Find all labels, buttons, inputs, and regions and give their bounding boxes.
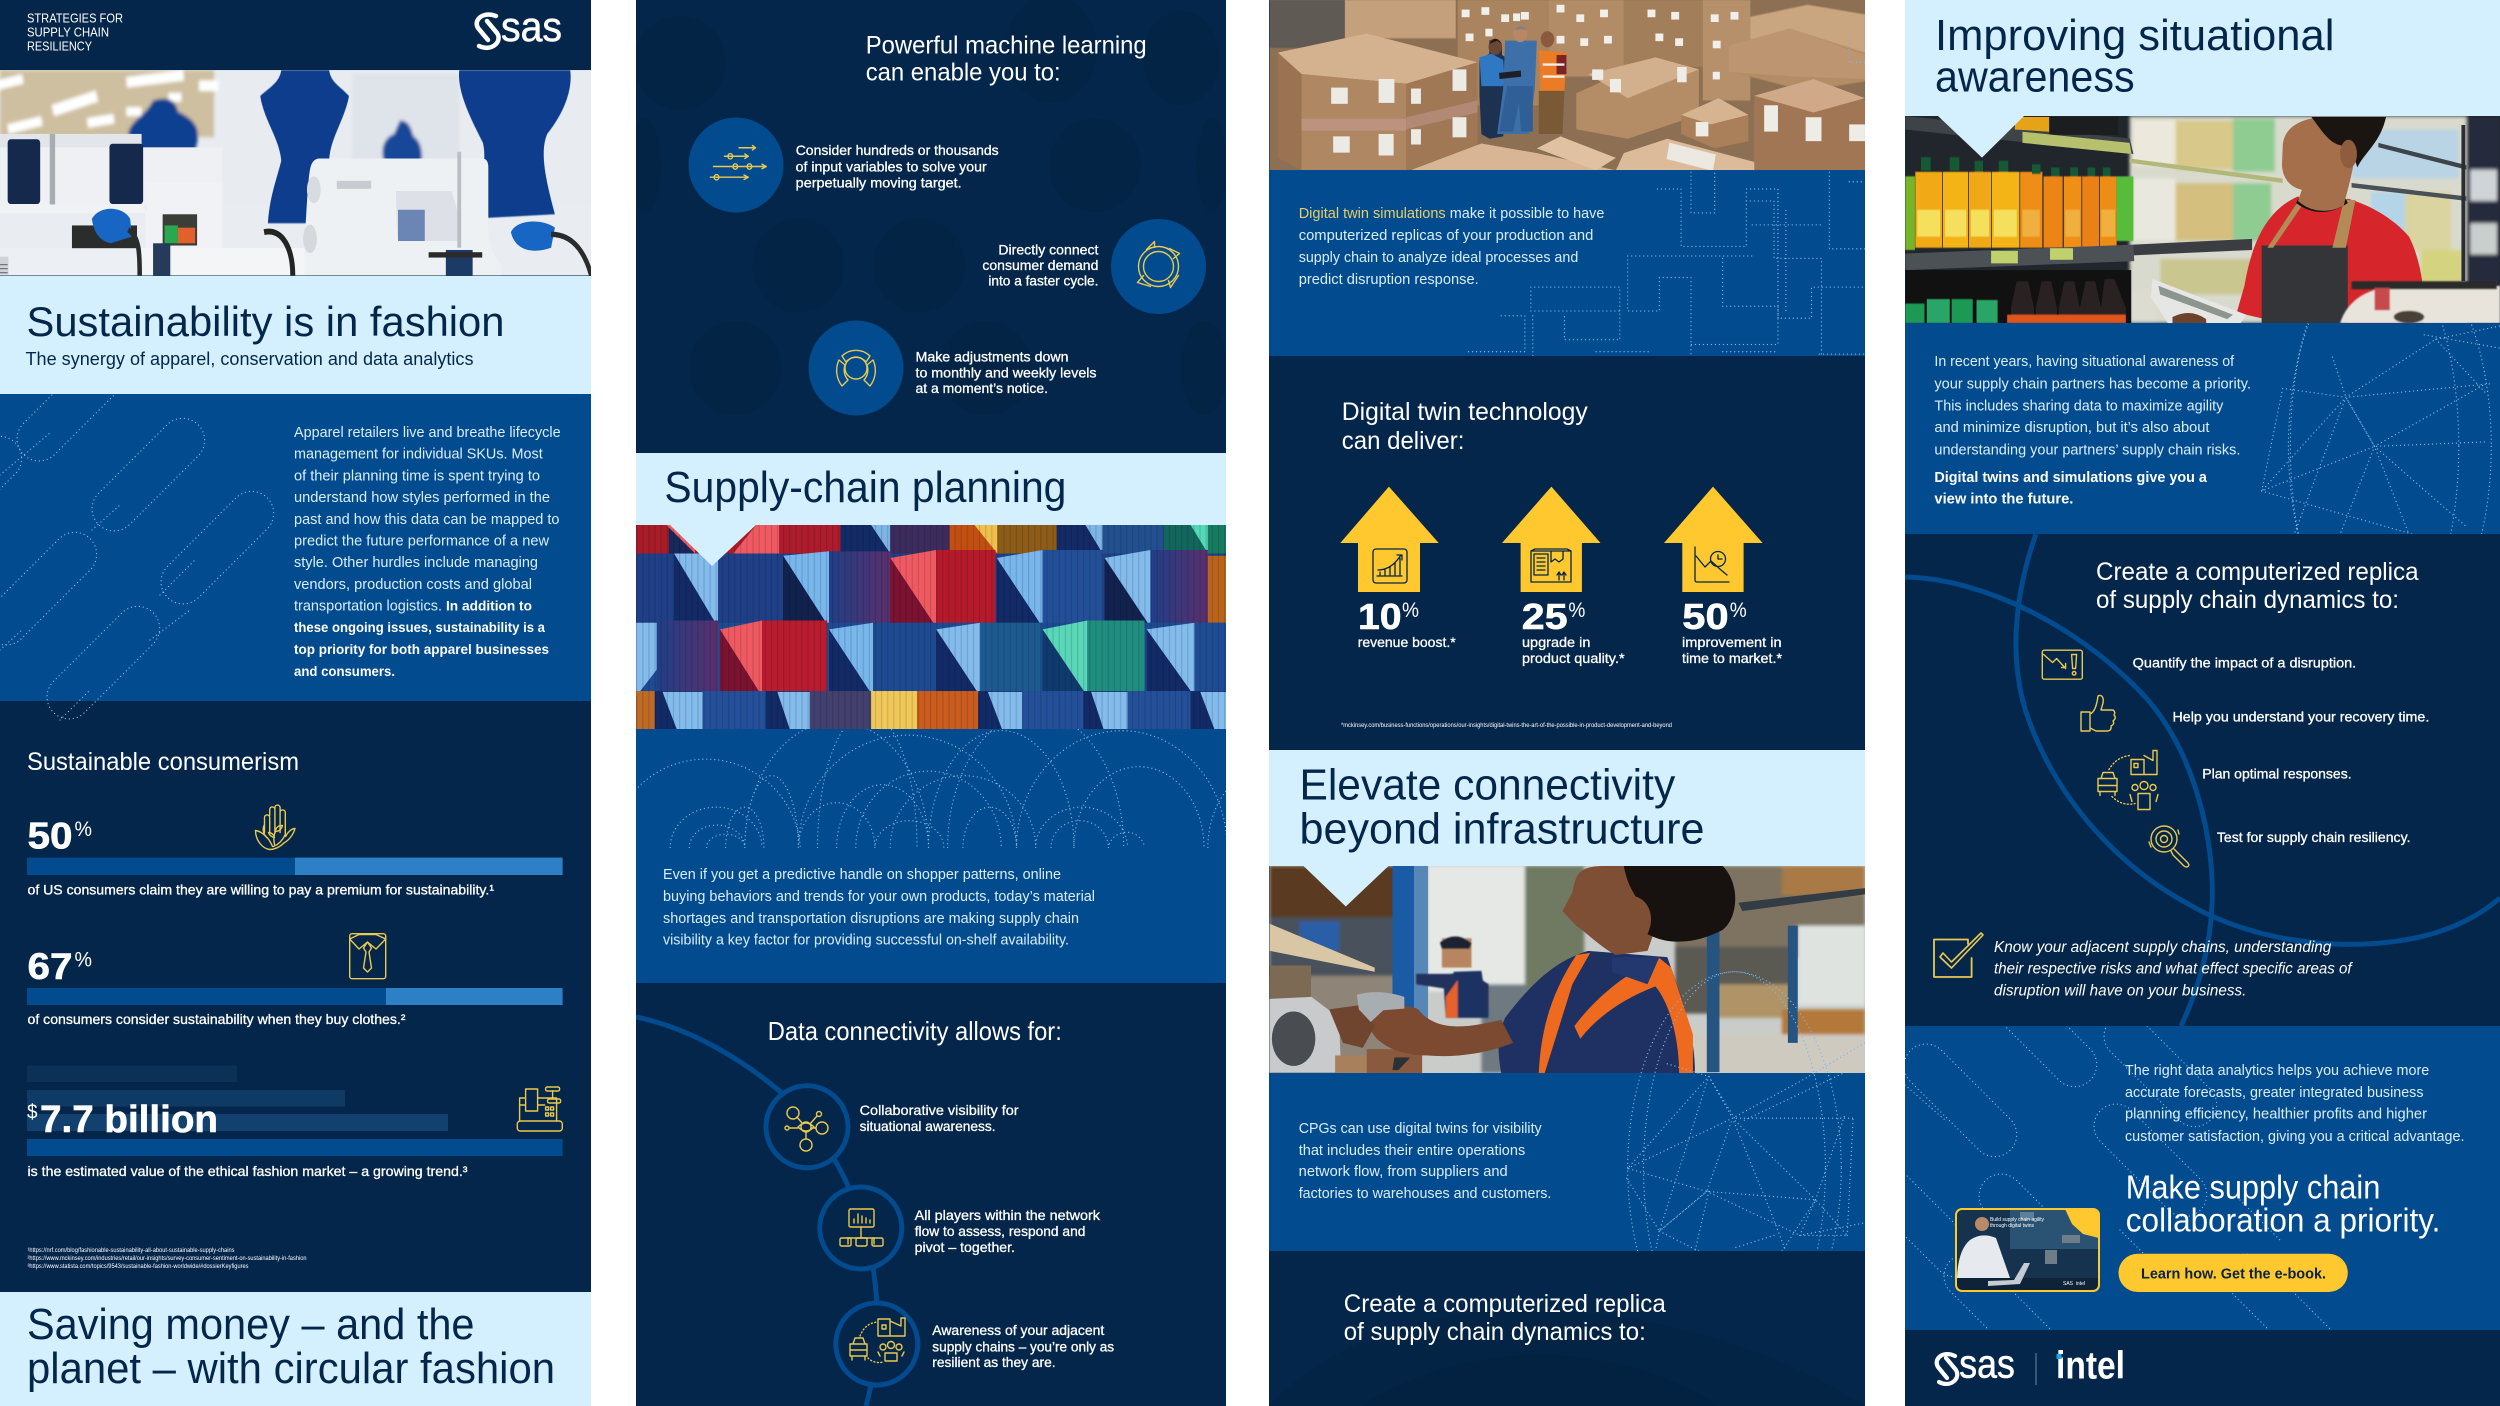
item: directly connect consumer demand: into a faster cycle. <box>988 273 1098 289</box>
stat: 7.7 billion: 7.7 billion <box>40 1099 218 1141</box>
callout: know your adjacent supply chains: disruption will have on your business. <box>1994 982 2246 999</box>
dotted globe pattern <box>2261 323 2500 534</box>
woman <box>1499 951 1695 1073</box>
analytics text: The right data analytics helps you achieve more <box>2125 1063 2429 1079</box>
panel: column 2 machine learning and supply-chain planning <box>636 0 1226 1406</box>
network flow text: factories to warehouses and customers. <box>1299 1186 1551 1202</box>
item: collaborative visibility: Collaborative visibility for <box>860 1102 1019 1118</box>
intro text: style. Other hurdles include managing <box>294 555 538 571</box>
panel: column 4 situational awareness <box>1855 0 2500 1406</box>
item: directly connect consumer demand <box>982 219 1206 314</box>
stat: 50 percent time to market: % <box>1730 599 1747 622</box>
panel: visibility blue section <box>636 729 1226 983</box>
item: make adjustments: to monthly and weekly levels <box>916 365 1096 381</box>
intro text: top priority for both apparel businesses <box>294 641 549 657</box>
stat: 50 percent: 50 <box>28 816 72 857</box>
curved lines background <box>1905 534 2500 1026</box>
row 3 <box>636 691 655 731</box>
intro text: management for individual SKUs. Most <box>294 447 543 463</box>
title band: elevate connectivity <box>1269 750 1865 866</box>
icon: shirt and tie <box>350 934 386 979</box>
panel: visibility network flow blue section <box>1269 971 1865 1251</box>
stat: 7.7 billion: is the estimated value of the ethical fashion market – a growing trend.³ <box>28 1163 468 1179</box>
item: make adjustments: at a moment’s notice. <box>916 380 1048 396</box>
network flow text: network flow, from suppliers and <box>1299 1164 1508 1180</box>
heading: create a computerized replica: Create a computerized replica <box>2096 558 2419 586</box>
item: all players within the network: All players within the network <box>915 1207 1101 1223</box>
situational awareness text <box>1934 354 2251 508</box>
footer logos: SAS and Intel <box>1937 1343 2125 1388</box>
photo: sewing machines and blue mannequins <box>0 70 591 275</box>
panel: column 1 sustainability <box>0 0 591 1406</box>
item: directly connect consumer demand: Directly connect <box>998 242 1099 258</box>
left pallet <box>1278 33 1477 84</box>
item: directly connect consumer demand: consumer demand <box>982 257 1098 273</box>
digital twin text: predict disruption response. <box>1299 271 1479 288</box>
bottom bottles <box>1905 270 2131 323</box>
item: consider input variables: Consider hundreds or thousands <box>796 142 999 158</box>
stat: 67 percent <box>27 946 563 1027</box>
stat: 50 percent: of US consumers claim they are willing to pay a premium for sustainability.¹ <box>28 882 494 898</box>
faint circle background <box>630 0 1227 415</box>
cart <box>2340 281 2500 323</box>
item: collaborative visibility <box>766 1086 1019 1168</box>
panel: data analytics call to action <box>1855 965 2500 1376</box>
intro text: Apparel retailers live and breathe lifecycle <box>294 425 561 441</box>
dotted chain pattern <box>0 394 274 721</box>
heading: make supply chain collaboration a priority: collaboration a priority. <box>2126 1201 2440 1238</box>
intro text <box>294 425 561 679</box>
footnote: digital twin source: *mckinsey.com/business-functions/operations/our-insights/digital-twins-the-art-of-the-possible-in-product-development-and-beyond <box>1341 723 1672 729</box>
icon: cash register <box>517 1087 562 1131</box>
digital twin text: supply chain to analyze ideal processes and <box>1299 249 1578 266</box>
item: quantify impact of a disruption: Quantify the impact of a disruption. <box>2133 654 2356 670</box>
row 2 <box>636 623 1227 694</box>
stat: 50 percent time to market <box>1664 487 1783 666</box>
header: document label: STRATEGIES FOR <box>27 12 123 26</box>
heading: powerful machine learning <box>866 32 1147 86</box>
bottles <box>1905 157 2133 250</box>
item: awareness of adjacent supply chains <box>836 1303 1114 1385</box>
small white labels background <box>1462 5 1738 79</box>
pointer: title band notch <box>670 525 756 566</box>
item: awareness of adjacent supply chains: Awareness of your adjacent <box>932 1322 1104 1338</box>
title band: elevate connectivity: Elevate connectivity <box>1300 760 1675 809</box>
button: learn how <box>2118 1254 2348 1292</box>
panel: column 3 digital twins and connectivity <box>1269 0 1865 1406</box>
pointer: improving band notch <box>1938 116 2024 158</box>
item: plan optimal responses: Plan optimal responses. <box>2202 765 2352 781</box>
visibility text <box>663 866 1095 948</box>
item: collaborative visibility: situational awareness. <box>860 1118 996 1134</box>
analytics text: accurate forecasts, greater integrated business <box>2125 1085 2424 1101</box>
heading: create a computerized replica <box>2096 558 2419 614</box>
logo: SAS <box>477 3 562 50</box>
footer logos: SAS and Intel: intel <box>2056 1344 2125 1388</box>
item: all players within the network <box>820 1187 1101 1269</box>
man <box>2237 196 2425 323</box>
button: learn how: Learn how. Get the e-book. <box>2141 1267 2326 1283</box>
heading: create a computerized replica <box>1344 1290 1666 1346</box>
floor <box>1410 144 1616 170</box>
heading: create a computerized replica: of supply chain dynamics to: <box>2096 586 2399 614</box>
item: all players within the network: flow to assess, respond and <box>915 1223 1085 1239</box>
item: consider input variables: of input variables to solve your <box>796 158 987 174</box>
analytics text: planning efficiency, healthier profits and higher <box>2125 1107 2427 1123</box>
title band: improving situational awareness: Improving situational <box>1935 11 2334 60</box>
title band: supply-chain planning: Supply-chain planning <box>664 463 1066 512</box>
digital twin text: computerized replicas of your production and <box>1299 227 1593 244</box>
stat: 25 percent product quality: product quality.* <box>1522 650 1625 666</box>
title band: elevate connectivity: beyond infrastructure <box>1300 805 1704 854</box>
situational awareness text: and minimize disruption, but it’s also about <box>1934 420 2209 436</box>
stat: 25 percent product quality: % <box>1568 599 1585 622</box>
intro text: transportation logistics. <box>294 599 442 615</box>
header: document label: RESILIENCY <box>27 40 93 54</box>
title band: saving money and the planet <box>0 1292 591 1406</box>
visibility text: Even if you get a predictive handle on shopper patterns, online <box>663 866 1061 883</box>
connector: curved line through data connectivity items <box>636 1017 877 1406</box>
title band: improving situational awareness <box>1905 0 2500 116</box>
footer logos: SAS and Intel: sas <box>1959 1343 2015 1387</box>
people <box>1479 39 1504 139</box>
header: document label <box>27 12 123 54</box>
item: awareness of adjacent supply chains: resilient as they are. <box>932 1354 1056 1370</box>
panel: intro blue section <box>0 394 591 721</box>
item: plan optimal responses <box>2098 750 2352 810</box>
faint concentric curves background <box>1269 1310 1865 1406</box>
stat: 25 percent product quality: upgrade in <box>1522 634 1590 650</box>
panel: situational awareness blue section <box>1905 323 2500 534</box>
situational awareness text: In recent years, having situational awareness of <box>1934 354 2235 370</box>
stat: 50 percent: % <box>74 818 92 841</box>
title band: saving money and the planet: planet – with circular fashion <box>27 1344 555 1393</box>
analytics text <box>2125 1063 2464 1145</box>
heading: digital twin technology: can deliver: <box>1342 427 1464 455</box>
item: make adjustments: Make adjustments down <box>916 349 1068 365</box>
network flow text <box>1299 1121 1551 1202</box>
callout: know your adjacent supply chains: Know your adjacent supply chains, understanding <box>1994 939 2332 956</box>
icon: hand holding plant <box>256 805 295 850</box>
item: all players within the network: pivot – together. <box>915 1239 1015 1255</box>
item: make adjustments <box>808 320 1096 416</box>
heading: digital twin technology: Digital twin technology <box>1342 398 1588 426</box>
intro text: past and how this data can be mapped to <box>294 512 560 528</box>
situational awareness text: your supply chain partners has become a priority. <box>1934 376 2251 392</box>
stat: 10 percent revenue boost: revenue boost.* <box>1358 634 1456 650</box>
situational awareness text: This includes sharing data to maximize agility <box>1934 399 2224 415</box>
intro text: and consumers. <box>294 663 395 679</box>
title band: supply-chain planning <box>636 453 1226 525</box>
dotted chain pattern <box>1855 965 2346 1376</box>
pointer: elevate band notch <box>1304 866 1388 906</box>
item: consider input variables <box>688 118 999 212</box>
title band: saving money and the planet: Saving money – and the <box>27 1300 474 1349</box>
title band: sustainability is in fashion: The synergy of apparel, conservation and data analytics <box>26 348 474 369</box>
right boxes <box>1576 68 1699 139</box>
e-book thumbnail: through digital twins <box>1990 1223 2034 1229</box>
callout: know your adjacent supply chains: their respective risks and what effect specific areas of <box>1994 961 2353 978</box>
analytics text: customer satisfaction, giving you a critical advantage. <box>2125 1129 2464 1145</box>
intro text: In addition to <box>446 598 532 614</box>
title band: improving situational awareness: awareness <box>1935 52 2135 102</box>
heading: digital twin technology <box>1342 398 1588 455</box>
row 0 <box>668 528 695 554</box>
footnotes: column 1 sources: ³https://www.statista.com/topics/9543/sustainable-fashion-worldwide/#dossierKeyfigures <box>28 1264 248 1270</box>
situational awareness text: view into the future. <box>1934 492 2073 508</box>
digital twin text: Digital twin simulations <box>1299 205 1446 222</box>
heading: create a computerized replica: of supply chain dynamics to: <box>1344 1318 1646 1346</box>
item: quantify impact of a disruption <box>2042 650 2356 679</box>
stat: 25 percent product quality <box>1502 487 1625 666</box>
intro text: predict the future performance of a new <box>294 534 550 550</box>
heading: create a computerized replica: Create a computerized replica <box>1344 1290 1666 1318</box>
photo: warehouse team among boxes <box>1269 0 1865 171</box>
stat: 7.7 billion: $ <box>27 1102 38 1124</box>
heading: powerful machine learning: Powerful machine learning <box>866 32 1147 60</box>
stat: 10 percent revenue boost: % <box>1402 599 1419 622</box>
title band: sustainability is in fashion: Sustainability is in fashion <box>26 298 504 345</box>
visibility text: visibility a key factor for providing successful on-shelf availability. <box>663 932 1069 948</box>
digital twin text <box>1299 205 1604 288</box>
situational awareness text: understanding your partners’ supply chain risks. <box>1934 442 2240 458</box>
situational awareness text: Digital twins and simulations give you a <box>1934 470 2208 486</box>
item: test supply chain resiliency <box>2149 826 2410 867</box>
stat: 67 percent: 67 <box>28 946 72 987</box>
visibility text: buying behaviors and trends for your own products, today’s material <box>663 888 1095 905</box>
row 1 <box>636 554 1227 627</box>
intro text: of their planning time is spent trying to <box>294 468 540 484</box>
header: document label: SUPPLY CHAIN <box>27 26 109 40</box>
logo: SAS: sas <box>501 3 562 50</box>
intro text: these ongoing issues, sustainability is a <box>294 619 545 635</box>
circuit dotted pattern <box>1468 33 1865 356</box>
left shelf top <box>1905 116 2133 154</box>
item: understand recovery time: Help you understand your recovery time. <box>2172 709 2429 725</box>
photo: shipping containers <box>636 525 1227 733</box>
stat: 67 percent: % <box>74 948 92 972</box>
stat: 10 percent revenue boost: 10 <box>1358 596 1402 637</box>
dotted globe pattern <box>1626 971 1865 1251</box>
stat: 50 percent time to market: time to market.* <box>1682 650 1783 666</box>
photo: shop worker with tablet at shelves <box>1905 116 2500 323</box>
machines <box>0 134 142 144</box>
item: consider input variables: perpetually moving target. <box>796 174 962 190</box>
network flow text: that includes their entire operations <box>1299 1143 1525 1159</box>
e-book thumbnail: SAS intel <box>2063 1281 2085 1287</box>
title band: sustainability is in fashion <box>0 276 591 394</box>
stat: 50 percent time to market: 50 <box>1682 596 1729 637</box>
intro text: vendors, production costs and global <box>294 577 532 593</box>
stat: 67 percent: of consumers consider sustainability when they buy clothes.² <box>28 1011 406 1027</box>
heading: make supply chain collaboration a priority <box>2126 1168 2440 1238</box>
item: test supply chain resiliency: Test for supply chain resiliency. <box>2217 829 2410 845</box>
intro text: understand how styles performed in the <box>294 490 550 506</box>
dotted arcs pattern <box>636 729 1226 848</box>
visibility text: shortages and transportation disruptions are making supply chain <box>663 910 1079 927</box>
photo: worker scanning parts in warehouse <box>1269 866 1865 1073</box>
callout: know your adjacent supply chains <box>1934 933 2353 999</box>
footnotes: column 1 sources: ¹https://nrf.com/blog/fashionable-sustainability-all-about-sustainable-supply-chains <box>28 1248 234 1254</box>
heading: sustainable consumerism: Sustainable consumerism <box>27 748 299 776</box>
heading: powerful machine learning: can enable you to: <box>866 58 1061 86</box>
stat: 50 percent time to market: improvement in <box>1682 634 1782 650</box>
e-book thumbnail: Build supply chain agility <box>1990 1217 2044 1223</box>
heading: make supply chain collaboration a priority: Make supply chain <box>2126 1168 2380 1205</box>
stat: 7.7 billion <box>27 1066 563 1179</box>
item: understand recovery time <box>2081 695 2429 731</box>
stat: 50 percent <box>27 816 563 898</box>
main machine <box>304 158 501 275</box>
footnotes: column 1 sources: ²https://www.mckinsey.com/industries/retail/our-insights/survey-consumer-sentiment-on-sustainability-in-fashion <box>28 1256 306 1262</box>
stat: 10 percent revenue boost <box>1340 487 1456 650</box>
stat: 25 percent product quality: 25 <box>1522 596 1568 637</box>
footnotes: column 1 sources <box>28 1248 306 1270</box>
item: awareness of adjacent supply chains: supply chains – you’re only as <box>932 1338 1114 1354</box>
heading: data connectivity: Data connectivity allows for: <box>768 1016 1062 1046</box>
network flow text: CPGs can use digital twins for visibility <box>1299 1121 1542 1137</box>
panel: digital twin blue section <box>1269 33 1865 356</box>
e-book thumbnail <box>1956 1209 2099 1291</box>
digital twin text: make it possible to have <box>1450 205 1604 222</box>
